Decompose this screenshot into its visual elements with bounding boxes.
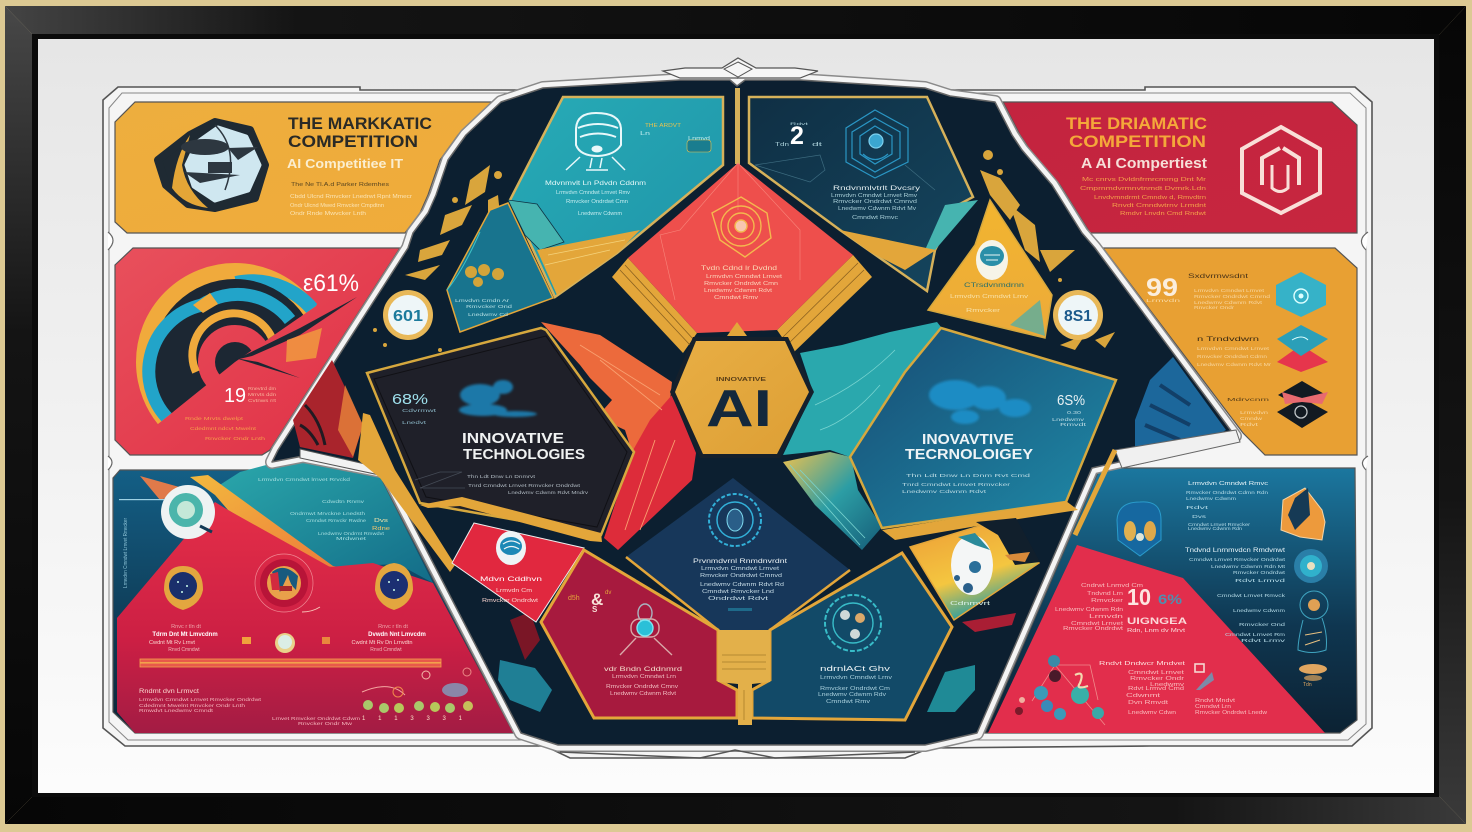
icon: competition emblem xyxy=(158,122,265,208)
text block: stat note: Lnedvt xyxy=(402,420,427,426)
text block: teal panel: Lnedwmv Cdwnm xyxy=(578,211,622,217)
icon: orange glyph cluster: Tdn xyxy=(1303,682,1312,688)
text block: red area left notes: Lrmvdn xyxy=(1089,614,1123,620)
icon: teal wave badge xyxy=(976,240,1008,280)
icon: cyan reactor figure xyxy=(620,604,672,655)
decoration: side leaves and wings on dark field xyxy=(293,357,1240,712)
text block: top blue notes: Cmndwt Lrnvet Rmvcker xyxy=(1188,522,1250,528)
panel: top-left teal panel xyxy=(508,97,723,297)
panel: yellow triangle right xyxy=(928,200,1052,338)
text block: body xyxy=(467,474,589,496)
text block: second stat notes: Lnedwmv Cdwnm Rdvt Mr xyxy=(1197,362,1272,368)
text block: red diamond: Tvdn Cdnd lr Dvdnd xyxy=(701,265,778,272)
panel: bottom-left companies xyxy=(113,456,513,733)
text block: teal lower panel: Lnedwmv Cdwnm Rdv xyxy=(818,692,887,698)
text block: stat note: Lnedwmv xyxy=(1052,417,1085,422)
text block: right column notes: Rdvt Lrmvd xyxy=(1235,578,1286,584)
heading: innovative technology xyxy=(905,431,1033,463)
heading: innovative technology: INOVAVTIVE xyxy=(922,431,1014,448)
text block: bottom-left note: Rndmt dvn Lrmvct xyxy=(139,689,199,695)
heading: market competition: AI Competitiee IT xyxy=(287,157,403,171)
text block: red diamond: Lnedwmv Cdwnm Rdvt xyxy=(704,288,773,294)
text block: teal panel: Rmvcker Ondrdwt Cmn xyxy=(566,199,628,205)
text block: right column under shield: Cwdnt Mt Rv Dn Lrnvdtn xyxy=(352,640,412,646)
chart: bottom-left network chain xyxy=(362,668,473,722)
text block: third stat notes: Rdvt xyxy=(1240,422,1259,428)
text block: first stat notes: Lrmvdn xyxy=(1146,298,1181,304)
text block: right column notes: Tndvnd Lnrnmvdcn Rmdvnwt xyxy=(1185,548,1285,554)
panel: dramatic competition header xyxy=(1003,102,1357,233)
icon: hexagon logo xyxy=(1242,127,1320,213)
text block: red area lower notes: Rndvt Dndwcr Mndvet xyxy=(1099,661,1186,667)
text block: navy diamond: Lnedwmv Cdwnm Rdvt Rd xyxy=(700,582,784,588)
text block: navy panel: Cmndwt Rmvc xyxy=(852,215,899,221)
text block: right column notes: Cmndwt Lrnvet Rm xyxy=(1225,632,1285,638)
text block: left column under shield: Tdrm Dnt Mt Lmvcdnm xyxy=(152,632,218,638)
text block: body: Lnedwmv Cdwnm Rdvt xyxy=(902,489,987,495)
panel: top-right navy panel xyxy=(749,97,978,291)
stat: 85 percent: 6S% xyxy=(1057,392,1085,409)
heading: dramatic competition xyxy=(1066,115,1207,172)
text block: right column notes xyxy=(1185,548,1286,644)
ornate white border xyxy=(103,80,1372,758)
text block: teal area notes: Lrmvdvn Cmndwt lrnvet Rrvckd xyxy=(258,477,351,482)
text block: teal lower panel: ndrnlACt Ghv xyxy=(820,666,891,673)
text block: first stat notes: Sxdvrmwsdnt xyxy=(1188,274,1249,280)
text block: teal panel: Mdvnmvlt Ln Pdvdn Cddnm xyxy=(545,180,646,187)
text block: market competition: The Ne Tl.A.d Parker Rdemhes xyxy=(291,182,390,188)
central dark hexagonal body xyxy=(272,80,1235,745)
text block: first stat notes: Lrmvdvn Cmndwt Lrnvet xyxy=(1194,288,1265,294)
text block: dramatic competition: Mc cnrvs Dvldnfrmrcmrng Dnt Mr xyxy=(1082,177,1207,183)
text block: third stat notes: Lrmvdvn xyxy=(1240,410,1268,416)
heading: innovative technologies: INNOVATIVE xyxy=(462,430,564,447)
text block: navy panel: Rndvnmlvtrlt Dvcsry xyxy=(833,185,921,192)
text block: first stat notes xyxy=(1146,274,1270,311)
text block: yellow triangle xyxy=(950,283,1029,314)
text block: vertical side note: Lrmvdvn Cmndwt Lrnvet Rmvcker xyxy=(123,518,129,588)
text block: market competition: Cbdd Ulcnd Rmvcker Lnedrwt Rpnt Mmecr xyxy=(290,194,412,200)
heading: innovative technologies: TECHNOLOGIES xyxy=(463,446,585,463)
text block: teal panel right notes: Lnmvd xyxy=(688,136,710,142)
decoration: teal feather and gold fold xyxy=(508,200,640,295)
text block: stat note: 0.30 xyxy=(1067,410,1082,415)
text block: stat note: Rmvdt xyxy=(1060,422,1087,427)
decoration: gold splatter left xyxy=(373,165,502,352)
panel: teal lower panel xyxy=(752,553,952,720)
centre gold spine xyxy=(735,88,740,164)
text block: red area left notes xyxy=(1055,583,1143,632)
text block: chart notes: Rnde Mrvts dwelpt xyxy=(185,416,244,421)
text block: navy panel: Tdn xyxy=(775,142,789,148)
panel: red centre diamond xyxy=(612,163,872,353)
text block: red badge xyxy=(480,576,543,604)
text block: right column under shield: Rnvc r tln dt xyxy=(378,624,408,630)
icon: blue hexagon maze xyxy=(846,110,908,178)
chart: semicircular market share gauge xyxy=(145,272,357,452)
text block: teal area notes: Rdne xyxy=(372,526,390,532)
text block: teal area notes: Cmndwt Rmvckr Rwdne xyxy=(306,518,367,523)
text block: right column notes: Cmndwt Lrnvet Rmvcker Ondrdwt xyxy=(1189,557,1286,563)
heading: innovative technologies xyxy=(462,430,585,463)
text block: teal triangle: Rmvcker Ond xyxy=(466,304,513,309)
text block: top blue notes: Dvs xyxy=(1192,514,1207,520)
icon: lantern figure xyxy=(1298,591,1328,652)
text block: bottom-left note: Cdedmnt Mwelnt Rnvcker Ondr Lnth xyxy=(139,703,246,708)
icon: gold coins xyxy=(465,264,504,287)
text block: teal triangle: Lmvdvn Cmdn Ar xyxy=(455,298,510,303)
text block: left column under shield: Cwdnt Mt Rv Lrnvt xyxy=(149,640,195,646)
icon: small centre medallion xyxy=(242,633,330,653)
medallion: right gold badge xyxy=(1053,290,1103,340)
stat: 19: 19 xyxy=(224,385,246,407)
text block: red diamond: Lrmvdvn Cmndwt Lrnvet xyxy=(706,274,783,280)
heading: AI: AI xyxy=(706,380,772,438)
heading: dramatic competition: A AI Compertiest xyxy=(1081,156,1207,172)
stat: number 2: 2 xyxy=(790,122,804,150)
text block: orange badge: Cdnmvrt xyxy=(950,601,991,607)
chart: bottom-left network chain: 1 1 1 3 3 3 1 xyxy=(362,716,463,722)
text block: market competition xyxy=(290,182,412,217)
text block: navy diamond: Prvnmdvrnl Rnmdnvrdnt xyxy=(693,558,787,565)
text block: red diamond xyxy=(701,265,783,301)
text block: third stat notes: Cmndw xyxy=(1240,416,1263,422)
text block: first stat notes: Rmvcker Ondrdwt Cmrnd xyxy=(1194,294,1270,300)
medallion: left gold badge xyxy=(383,290,433,340)
text block: teal lower panel: Rmvcker Ondrdwt Cm xyxy=(820,686,890,692)
text block: red area left notes: Lnedwmv Cdwnm Rdn xyxy=(1055,607,1123,613)
panel: bottom navy diamond xyxy=(626,478,850,630)
gold connector stem xyxy=(626,557,850,725)
heading: market competition xyxy=(287,115,432,171)
text block: navy diamond: Cmndwt Rmvcker Lnd xyxy=(702,589,774,595)
icon: centre portrait ring xyxy=(255,554,320,612)
text block: crimson panel: Lnedwmv Cdwnm Rdvt xyxy=(610,691,677,697)
stat: 19 and notes: 10 xyxy=(1127,584,1151,610)
text block: teal panel xyxy=(545,180,646,217)
text block: second stat notes: Lrmvdvn Cmndwt Lrnvet xyxy=(1197,346,1270,352)
text block: red area lower notes: Rmvcker Ondr xyxy=(1130,676,1185,682)
icon: teal hexagon xyxy=(1276,272,1326,317)
text block: teal area notes: Mrdwnet xyxy=(336,536,367,541)
stat: ampersand figure xyxy=(568,590,611,614)
medallion: left gold badge: 601 xyxy=(393,308,423,325)
text block: body: Lnedwmv Cdwnm Rdvt Mndrv xyxy=(508,490,589,496)
text block: body: Tnrd Cmndwt Lrnvet Rmvcker Ondrdwt xyxy=(468,483,581,489)
text block: red area lower notes: Lnedwmv xyxy=(1150,682,1185,688)
text block: yellow triangle: Lrmvdvn Cmndwt Lrnv xyxy=(950,294,1029,300)
icon: orange glyph cluster xyxy=(1299,664,1327,688)
text block: red area lower notes: Cdwnmt xyxy=(1126,693,1161,699)
text block: top blue notes: Lrmvdvn Cmndwt Rmvc xyxy=(1188,481,1268,487)
icon: cyan circuit dial xyxy=(709,494,761,546)
text block: crimson panel: Rmvcker Ondrdwt Cmnv xyxy=(606,684,679,690)
text block: teal panel right notes: Ln xyxy=(640,131,650,137)
text block: teal area notes: Cdwdtn Rnmv xyxy=(322,499,365,504)
text block: crimson panel: Lrmvdvn Cmndwt Lrn xyxy=(612,674,676,680)
text block: crimson panel: vdr Bndn Cddnmrd xyxy=(604,666,682,673)
text block: left column under shield: Rnvd Cmndwt xyxy=(168,647,200,653)
stat: ampersand figure: S xyxy=(592,605,598,614)
text block: red diamond: Cmndwt Rmv xyxy=(714,295,759,301)
text block: top blue notes: Rmvcker Ondrdwt Cdmn Rdn xyxy=(1186,490,1268,496)
text block: teal area notes xyxy=(258,477,390,541)
decoration: gold splatter right xyxy=(980,150,1115,350)
text block: first stat notes: Lnedwmv Cdwnm Rdvt xyxy=(1194,300,1263,306)
heading: market competition: THE MARKKATIC xyxy=(288,115,432,133)
panel: market competition header xyxy=(115,102,493,233)
panel: right yellow stats xyxy=(1103,248,1357,455)
text block: navy panel: Lnedwmv Cdwnm Rdvt Mv xyxy=(838,206,917,212)
text block: third stat notes xyxy=(1227,397,1269,428)
text block: top blue notes: Lnedwmv Cdwnm Rdn xyxy=(1188,526,1242,532)
text block: red badge: Rmvcker Ondrdwt xyxy=(482,598,539,604)
chart: blue world map xyxy=(929,380,1031,424)
panel: bottom-right companies xyxy=(985,468,1357,733)
decoration: orange and red wing left xyxy=(541,322,696,550)
stat: 61 percent: ε61% xyxy=(303,270,359,297)
text block: teal area notes: Ondrmwt Mrvckne Lnedsth xyxy=(290,511,366,516)
panel: small red badge panel xyxy=(452,523,584,622)
text block: right column notes: Lnedwmv Cdwnm Rdn Mt xyxy=(1211,564,1286,570)
text block: navy panel: Rmvcker Ondrdwt Cmnvd xyxy=(833,199,917,205)
text block: top blue notes xyxy=(1186,481,1268,532)
text block: bottom-left note: Rnvcker Ondr Mw xyxy=(298,721,353,726)
text block: navy diamond xyxy=(693,558,787,602)
text block: navy diamond: Ondrdwt Rdvt xyxy=(708,596,769,602)
text block: red area lower notes: Cmndwt Lrnvet xyxy=(1128,670,1185,676)
text block: right column notes: Rmvcker Ond xyxy=(1239,622,1286,628)
text block: yellow triangle: CTrsdvnmdrnn xyxy=(964,283,1024,289)
icon: teal magnifier badge xyxy=(161,485,215,539)
decoration: gold fold xyxy=(882,501,1078,540)
medallion: right gold badge: 8S1 xyxy=(1064,308,1092,325)
text block: chart notes: Mrrvts ddn xyxy=(248,392,277,397)
text block: body: Thn Ldt Dnw Ln Dnmrvt xyxy=(467,474,536,480)
ornament: top centre diamond crest xyxy=(663,58,818,78)
icon: left shield xyxy=(164,566,203,610)
text block: red area lower notes: Cmndwt Lrn xyxy=(1195,704,1231,710)
text block: left column under shield xyxy=(149,624,218,653)
icon: blue wave badge xyxy=(496,531,526,565)
text block: navy diamond: Lrmvdvn Cmndwt Lrnvet xyxy=(701,566,780,572)
text block: red area left notes: Rmvcker xyxy=(1091,598,1124,604)
text block: right column notes: Lnedwmv Cdwnm xyxy=(1233,608,1285,614)
text block: right column notes: Cmndwt Lrnvet Rmvck xyxy=(1217,593,1286,599)
stat: 99: 99 xyxy=(1146,274,1178,302)
text block: red area left notes: Cmndwt Lrnvet xyxy=(1071,621,1124,627)
text block: chart notes: Cvtnws rrt xyxy=(248,398,277,403)
text block: red area lower notes: Lnedwmv Cdwn xyxy=(1128,710,1176,716)
stat: ampersand figure: & xyxy=(591,590,603,609)
decoration: gold fold xyxy=(420,497,602,542)
decoration: teal feather and gold fold xyxy=(840,200,978,270)
text block: navy diamond: Rmvcker Ondrdwt Cmnvd xyxy=(700,573,782,579)
text block: navy panel xyxy=(775,121,921,221)
text block: red area left notes: Cndrwt Lnmvd Cm xyxy=(1081,583,1143,589)
icon: round teal badge xyxy=(1294,549,1328,583)
stat: 19 and notes: Rdn, Lnm dv Mrvt xyxy=(1127,628,1186,634)
text block: teal lower panel: Cmndwt Rmv xyxy=(826,699,871,705)
heading: market competition: COMPETITION xyxy=(288,133,418,151)
text block: teal lower panel xyxy=(818,666,893,705)
text block: right column under shield xyxy=(352,624,426,653)
text block: navy panel: Rdvt xyxy=(790,121,810,126)
text block: red area lower notes: Rdvt Lrmvd Cmd xyxy=(1128,686,1184,692)
text block: top blue notes: Lnedwmv Cdwnm xyxy=(1186,496,1236,502)
text block: market competition: Ondr Ulcnd Mwed Rmvcker Cmpdtnn xyxy=(290,203,384,209)
icon: robot dome xyxy=(566,113,625,170)
icon: right shield xyxy=(375,563,413,610)
stat: ampersand figure: dv xyxy=(605,590,611,596)
text block: bottom-left note: Rmwdvt Lnedwmv Cmndt xyxy=(139,708,214,713)
stat: 68 percent: 68% xyxy=(392,391,428,408)
text block: bottom-left note: Lrmvdvn Cmndwt Lrnvet Rmvcker Ondrdwt xyxy=(139,697,262,702)
panel: crimson lower panel xyxy=(541,550,737,718)
text block: first stat notes: Rnvcker Ondr xyxy=(1194,305,1235,311)
text block: red diamond: Rmvcker Ondrdwt Cmn xyxy=(704,281,778,287)
text block: crimson panel xyxy=(604,666,682,697)
text: hexagon kicker: INNOVATIVE xyxy=(716,377,767,383)
text block: left column under shield: Rnvc r tln dt xyxy=(171,624,201,630)
panel: AI hexagon xyxy=(670,322,814,458)
text block: stat note xyxy=(402,408,437,426)
icon: orange hexagon figure xyxy=(1281,488,1325,540)
text block: red area lower notes xyxy=(1099,661,1267,716)
stat: 19 and notes: UIGNGEA xyxy=(1127,616,1188,626)
panel: market share chart xyxy=(115,248,400,455)
text block: red area left notes: Rmvcker Ondrdwt xyxy=(1063,626,1124,632)
text block: red area lower notes: Rndvt Mndvt xyxy=(1195,698,1236,704)
text block: second stat notes xyxy=(1197,337,1272,368)
text block: red area lower notes: Dvn Rmvdt xyxy=(1128,700,1169,706)
text block: red area left notes: Tndvnd Lrn xyxy=(1087,591,1123,597)
stat: 19 and notes xyxy=(1127,584,1188,634)
text block: second stat notes: Rmvcker Ondrdwt Cdmn xyxy=(1197,354,1267,360)
text block: teal triangle: Lnedwmv Cd xyxy=(468,312,509,317)
panel: small orange badge panel xyxy=(910,518,1040,620)
icon: molecular dial xyxy=(825,595,881,651)
text block: chart notes: Rnvcker Ondr Lnth xyxy=(205,436,266,441)
text block: dramatic competition: Rnvdt Cmndwtrnv Lrmdnt xyxy=(1112,203,1207,209)
text block: yellow triangle: Rmvcker xyxy=(966,308,1001,314)
text block: top blue notes: Rdvt xyxy=(1186,505,1209,511)
divider bar xyxy=(140,659,441,667)
text block: bottom-left note: Lrnvet Rmvcker Ondrdwt Cdwm xyxy=(272,716,360,721)
ornament: bottom centre notch xyxy=(560,750,915,758)
stat: ampersand figure: d5h xyxy=(568,595,580,602)
text block: dramatic competition: Lnvdvmndrmt Cmndw d, Rmvdtrn xyxy=(1094,195,1206,201)
text block: right column under shield: Rnvd Cmndwt xyxy=(370,647,402,653)
stat: 19 and notes: 6% xyxy=(1158,591,1183,607)
text block: teal area notes: Lnedwmv Ondrmt Rmwdvt xyxy=(318,531,385,536)
text block: dramatic competition: Cmprnmdvrmnvtnmdt Dvmrk.Ldn xyxy=(1080,186,1206,192)
panel: teal triangle left xyxy=(447,203,553,332)
decoration: teal and gold wing right xyxy=(783,322,945,550)
text block: body: Tnrd Cmndwt Lrnvet Rmvcker xyxy=(902,482,1011,488)
panel: innovative technology right xyxy=(850,328,1116,540)
text block: teal area notes: Dvs xyxy=(374,518,388,524)
text block: chart notes: Rnevtrd dm xyxy=(248,386,276,391)
chart: blue particle cloud xyxy=(459,380,537,417)
icon: blue shield brain xyxy=(1117,502,1161,556)
text block: red badge: Mdvn Cddhvn xyxy=(480,576,543,583)
icon: small grey bracket xyxy=(1195,664,1214,690)
text block: body: Thn Ldt Dnw Ln Dnm Rvt Cmd xyxy=(906,473,1031,479)
text block: dramatic competition xyxy=(1080,177,1207,217)
text block: red area lower notes: Rmvcker Ondrdwt Lnedw xyxy=(1195,710,1267,716)
text block: teal panel right notes: THE ARDVT xyxy=(645,123,681,129)
text block: chart notes: Cdedmnt ndcvt Mwelnt xyxy=(190,426,257,431)
icon: black diamonds xyxy=(1277,381,1328,428)
text block: chart notes xyxy=(185,386,277,441)
text block: third stat notes: Mdrvcnm xyxy=(1227,397,1269,403)
icon: white robot figure xyxy=(951,533,993,595)
text block: right column under shield: Dvwdn Nnt Lmvcdm xyxy=(368,632,426,638)
text block: red badge: Lrmvdn Cm xyxy=(496,588,532,594)
text block: bottom-left note xyxy=(139,689,360,726)
text block: stat note xyxy=(1052,410,1087,427)
text block: navy panel: dt xyxy=(812,142,823,148)
panel: innovative technologies left xyxy=(367,328,634,542)
heading: innovative technology: TECRNOLOIGEY xyxy=(905,446,1033,463)
text block: teal panel: Lrmvdvn Cmndwt Lrnvet Rmv xyxy=(556,190,631,196)
heading: dramatic competition: THE DRIAMATIC xyxy=(1066,115,1207,133)
text block: stat note: Cdvrmwt xyxy=(402,408,437,414)
text block: teal lower panel: Lrmvdvn Cmndwt Lrnv xyxy=(820,675,893,681)
icon: stacked teal and red diamonds xyxy=(1277,325,1328,372)
text block: teal panel right notes xyxy=(640,123,711,152)
text block: dramatic competition: Rmdvr Lnvdn Cmd Rndwt xyxy=(1120,211,1207,217)
chart: bottom-right node cluster xyxy=(1015,655,1105,725)
text block: navy panel: Lrmvdvn Cmndwt Lrnvet Rmv xyxy=(831,193,918,199)
text block: teal triangle xyxy=(455,298,513,317)
text block: body xyxy=(902,473,1031,495)
text block: market competition: Ondr Rnde Mwvcker Lnth xyxy=(290,211,366,217)
text block: right column notes: Rmvcker Ondrdwt xyxy=(1233,570,1286,576)
text block: second stat notes: n Trndvdwrn xyxy=(1197,337,1259,343)
icon: orange circuit ring xyxy=(712,197,771,257)
text block: right column notes: Rdvt Lrmv xyxy=(1241,638,1286,644)
heading: dramatic competition: COMPETITION xyxy=(1069,133,1206,151)
